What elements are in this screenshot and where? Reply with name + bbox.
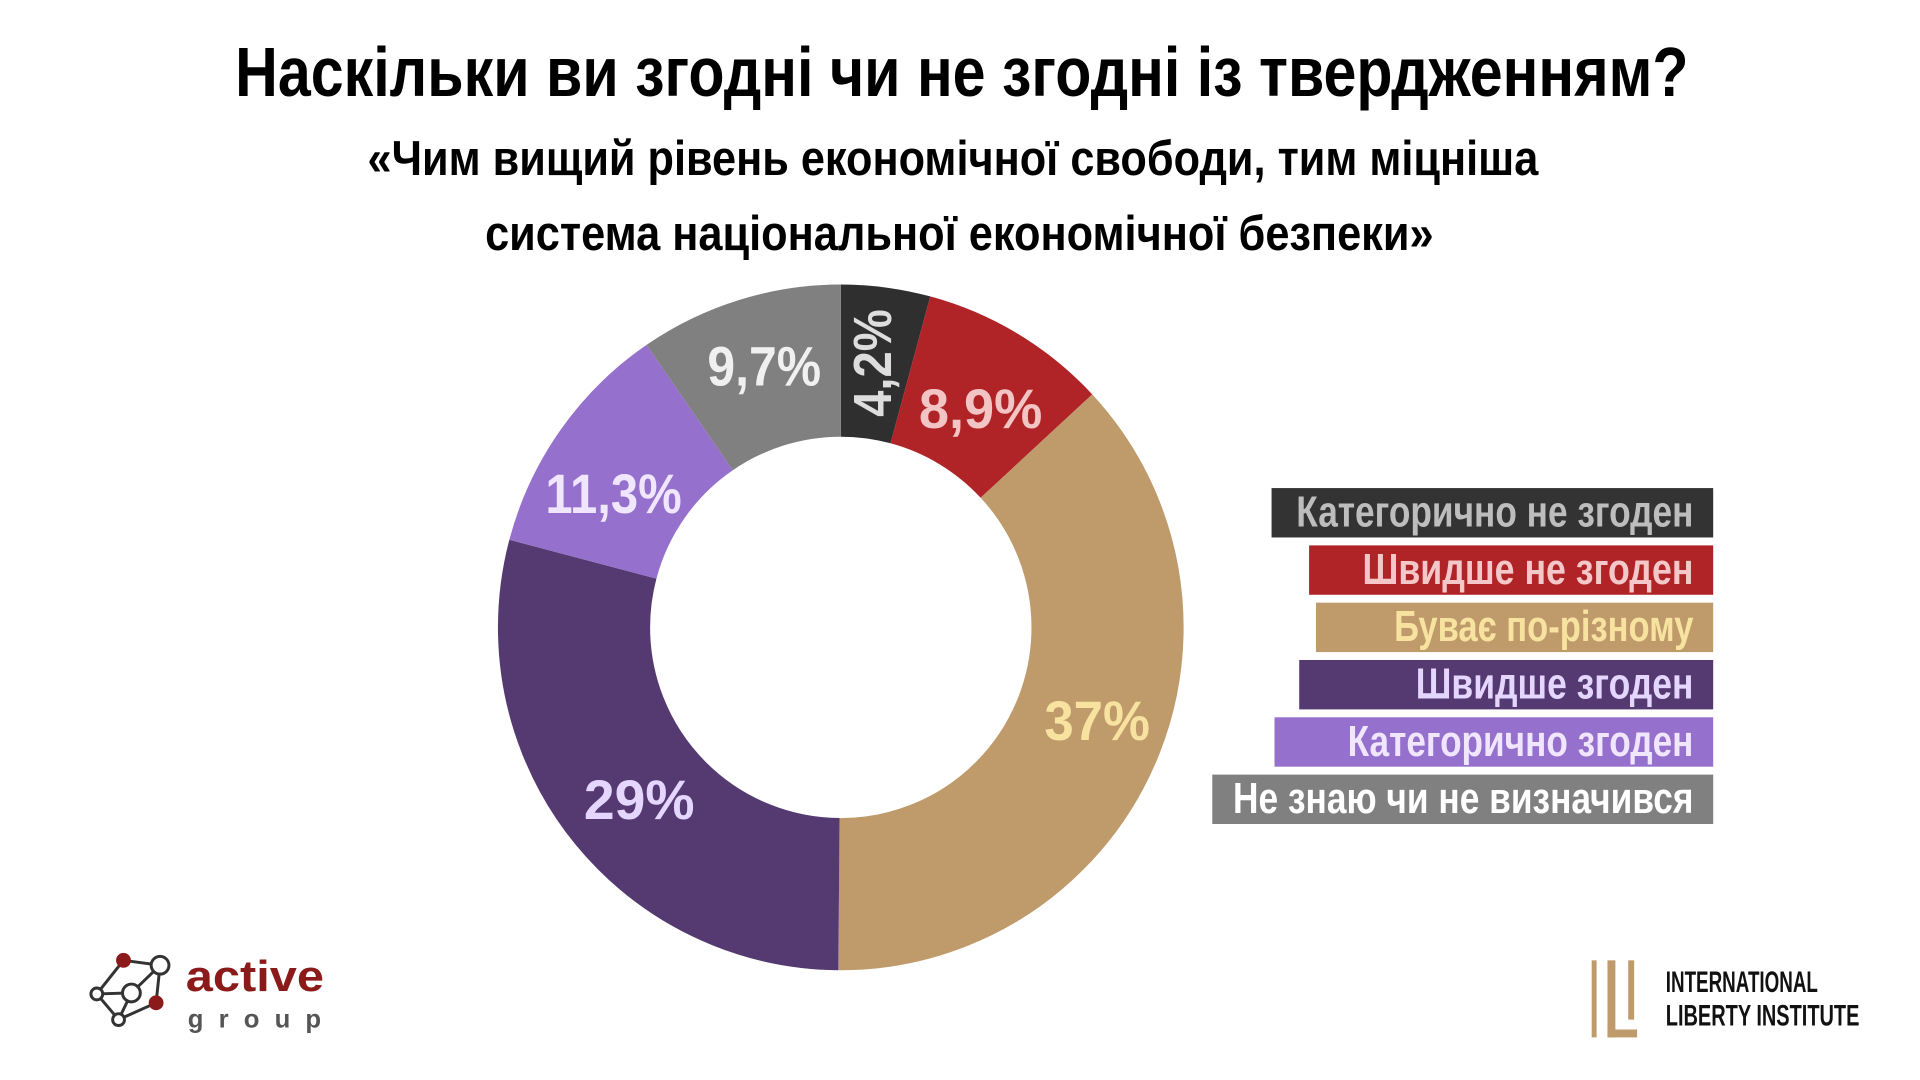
logo: active group	[91, 953, 324, 1034]
legend	[1212, 488, 1713, 824]
legend item 3	[1316, 603, 1713, 652]
legend item 4: Швидше згоден	[1416, 661, 1693, 709]
label 11.3%: 11,3%	[545, 463, 682, 525]
label 8.9%: 8,9%	[919, 378, 1042, 440]
label 29%: 29%	[584, 769, 695, 831]
subtitle: «Чим вищий рівень економічної свободи, тим міцніша	[368, 131, 1539, 186]
logo: active group: active	[186, 953, 324, 1001]
legend item 1: Категорично не згоден	[1296, 489, 1693, 537]
donut chart	[545, 309, 1150, 894]
label 37%: 37%	[1044, 690, 1150, 752]
label 9.7%: 9,7%	[707, 335, 821, 397]
subtitle	[368, 131, 1539, 261]
logo: active group: group	[188, 1006, 321, 1034]
legend item 3: Буває по-різному	[1394, 603, 1693, 651]
logo: International Liberty Institute	[1592, 960, 1859, 1037]
legend item 4	[1299, 660, 1713, 709]
label 4.2%: 4,2%	[844, 309, 903, 417]
subtitle: система національної економічної безпеки»	[485, 206, 1434, 261]
legend item 6: Не знаю чи не визначився	[1233, 775, 1693, 823]
logo: International Liberty Institute: INTERNATIONAL	[1666, 966, 1818, 999]
legend item 2: Швидше не згоден	[1362, 546, 1693, 594]
legend item 5: Категорично згоден	[1348, 718, 1693, 766]
title: Наскільки ви згодні чи не згодні із твердженням?	[235, 33, 1688, 111]
